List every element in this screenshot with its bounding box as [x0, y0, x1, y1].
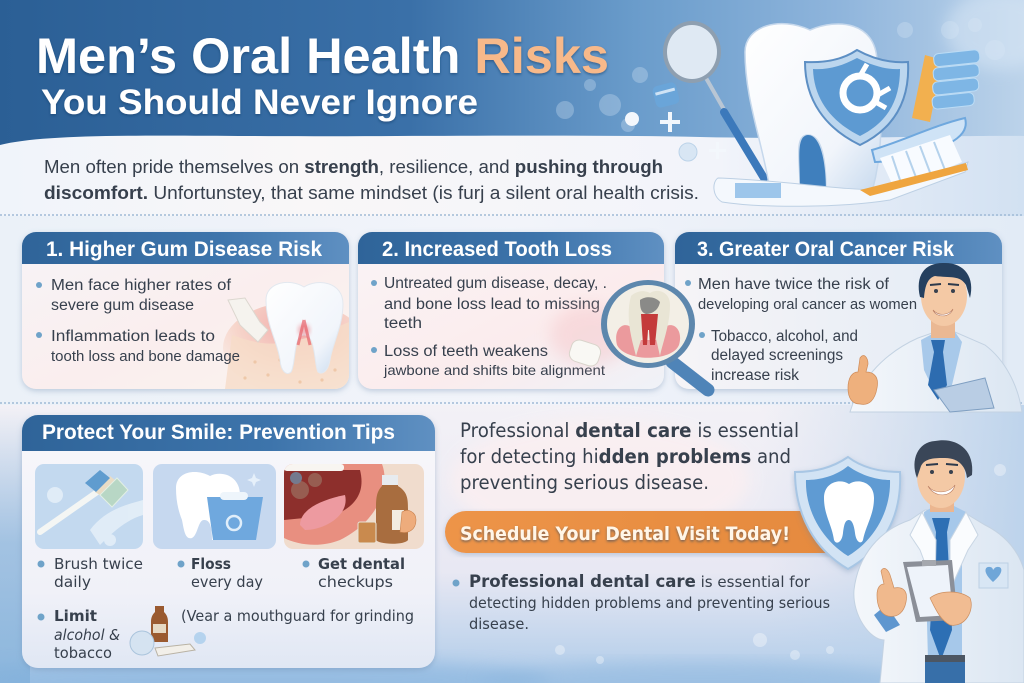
icon: bottle, mouthguard and toothpaste: [130, 606, 206, 656]
hair: [919, 263, 971, 298]
intro text: [44, 157, 699, 203]
neck and face: [921, 266, 967, 338]
tip: checkups: checkups: [318, 573, 393, 591]
tip: limit alcohol and tobacco: [38, 607, 120, 662]
icon: tooth with gum inflammation: [223, 282, 349, 389]
doctor illustration, upper: [848, 263, 1022, 412]
card heading: 2. Increased Tooth Loss: [382, 238, 612, 261]
tip: brush: [38, 555, 143, 591]
intro text: discomfort. Unfortunstey, that same mindset (is furj a silent oral health crisis.: [44, 183, 699, 203]
icon: large tooth: [745, 24, 881, 192]
bullets: tooth loss and bone damage: [51, 349, 240, 365]
pocket with heart: [979, 563, 1008, 588]
card heading: 3. Greater Oral Cancer Risk: [697, 238, 954, 261]
sleeve cuff: [874, 605, 900, 632]
thumbs up hand: [877, 568, 906, 616]
tip: mouthguard: (Vear a mouthguard for grinding: [181, 607, 414, 625]
bullets: Men face higher rates of: [51, 277, 232, 294]
callout text: preventing serious disease.: [460, 471, 709, 494]
bullets: delayed screenings: [711, 347, 843, 364]
icon: floss spool: [652, 81, 680, 109]
card heading: [675, 232, 1002, 264]
panel: higher gum disease risk: [22, 232, 367, 394]
title: Men’s Oral Health Risks: [36, 28, 609, 84]
bullet text, lower right: [452, 572, 830, 633]
panel heading: Protect Your Smile: Prevention Tips: [42, 421, 395, 444]
bullets: teeth: [384, 315, 422, 332]
icon: shield with tooth: [795, 457, 900, 569]
lapels: [910, 512, 978, 590]
neck and face: [917, 444, 965, 512]
tip: limit alcohol and tobacco: alcohol &: [54, 626, 120, 644]
hand on clipboard: [930, 592, 971, 625]
bullets: Men have twice the risk of: [698, 276, 890, 293]
divider: [0, 214, 1024, 216]
shirt: [921, 332, 962, 395]
hair: [914, 440, 972, 478]
trousers and belt: [925, 655, 965, 683]
intro text: Men often pride themselves on strength, resilience, and pushing through: [44, 157, 663, 177]
clipboard: [934, 378, 994, 412]
bullets: Inflammation leads to: [51, 328, 215, 345]
icon: magnifier with tooth cross-section: [601, 280, 708, 390]
tip: floss: [178, 555, 263, 591]
tie: [930, 518, 952, 660]
title: You Should Never Ignore: [41, 83, 478, 122]
bullets: Tobacco, alcohol, and: [711, 328, 858, 345]
callout text: Professional dental care is essential: [460, 419, 799, 442]
tip: checkups: Get dental: [318, 555, 405, 573]
bullets: jawbone and shifts bite alignment: [383, 362, 605, 378]
icon: toothpaste swirl: [872, 118, 966, 162]
tip: brush: Brush twice: [54, 555, 143, 573]
bullet text, lower right: disease.: [469, 615, 529, 633]
doctor illustration, lower: [854, 440, 1024, 683]
panel heading: [22, 415, 435, 451]
call to action button: Schedule Your Dental Visit Today!: [460, 523, 790, 545]
tip: limit alcohol and tobacco: tobacco: [54, 644, 112, 662]
bullet text, lower right: Professional dental care is essential for: [469, 572, 811, 591]
tie: [928, 340, 947, 400]
illustration: tooth with shield, mirror and toothbrushes: [625, 21, 985, 206]
bullets: [36, 277, 240, 365]
thumbnail: mouth and bottle: [284, 464, 424, 549]
icon: shield: [805, 50, 908, 145]
bullets: and bone loss lead to missing: [384, 296, 600, 313]
callout text: for detecting hidden problems and: [460, 445, 791, 468]
thumbs up hand: [848, 356, 878, 404]
tip: limit alcohol and tobacco: Limit: [54, 607, 97, 625]
panel: greater oral cancer risk: [675, 232, 1002, 389]
tip: floss: Floss: [191, 555, 231, 573]
bullets: Loss of teeth weakens: [384, 343, 548, 360]
tip: floss: every day: [191, 573, 263, 591]
card heading: [22, 232, 349, 264]
icon: sparkles: [625, 112, 726, 161]
panel: prevention tips: [22, 415, 435, 668]
thumbnail: floss: [153, 464, 276, 549]
callout text: [460, 419, 799, 494]
icon: upright toothbrush: [912, 49, 985, 122]
icon: pink glow and tooth fragment: [550, 305, 630, 368]
icon: dental mirror: [663, 21, 764, 178]
card heading: [358, 232, 664, 264]
title: [36, 28, 609, 122]
header banner: [0, 0, 1024, 165]
tip: brush: daily: [54, 573, 91, 591]
white coat: [854, 510, 1024, 683]
bullets: increase risk: [711, 367, 799, 384]
bullets: severe gum disease: [51, 297, 194, 314]
wavy intro band: [0, 136, 1024, 216]
bullets: developing oral cancer as women: [698, 297, 917, 313]
panel: increased tooth loss: [358, 232, 664, 389]
shirt: [924, 505, 966, 660]
white coat: [850, 332, 1022, 412]
call to action button: [445, 511, 835, 553]
bullet text, lower right: detecting hidden problems and preventing serious: [469, 594, 830, 612]
icon: lying toothbrush: [714, 135, 968, 206]
tip: checkups: [302, 555, 405, 591]
thumbnail: brushing: [35, 464, 143, 549]
bullets: [685, 276, 917, 384]
bullets: Untreated gum disease, decay, .: [384, 275, 607, 292]
card heading: 1. Higher Gum Disease Risk: [46, 238, 322, 261]
clipboard: [903, 560, 958, 622]
bullets: [371, 275, 607, 378]
